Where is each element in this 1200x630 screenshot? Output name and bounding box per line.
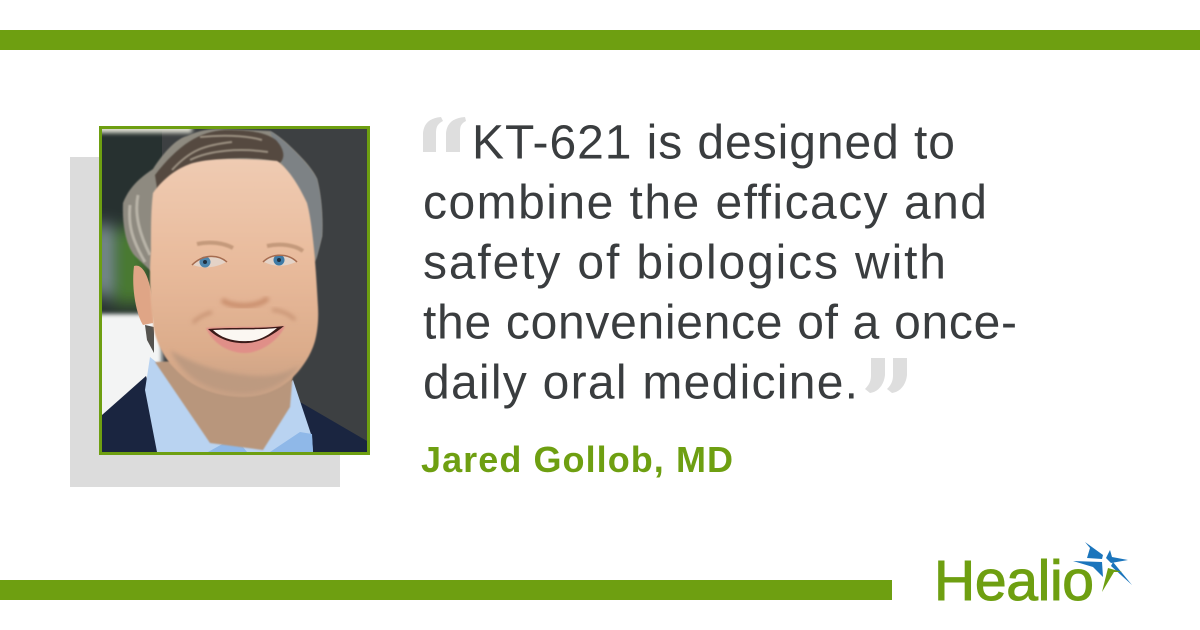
smile lines — [193, 310, 295, 323]
ear — [133, 266, 153, 325]
hair — [123, 129, 322, 273]
quote text: combine the efficacy and — [423, 176, 987, 230]
bottom green bar — [0, 580, 892, 600]
opening quotation mark — [423, 117, 466, 152]
quote text: the convenience of a once- — [423, 296, 1017, 350]
quote text — [423, 116, 1017, 410]
quote text: daily oral medicine. — [423, 356, 858, 410]
neck — [155, 360, 293, 450]
eyebrows — [197, 243, 303, 251]
Healio logo: Healio — [934, 549, 1094, 613]
top green bar — [0, 30, 1200, 50]
shirt collar — [145, 357, 313, 452]
quote text: safety of biologics with — [423, 236, 946, 290]
jacket — [102, 376, 157, 452]
face — [150, 159, 318, 397]
eyes — [193, 257, 226, 267]
stubble shading — [170, 350, 300, 393]
smile — [206, 326, 285, 353]
quote text: KT-621 is designed to — [472, 116, 955, 170]
gray offset panel behind portrait — [70, 157, 340, 487]
nose — [222, 298, 268, 306]
closing quotation mark — [865, 358, 907, 393]
attribution: Jared Gollob, MD — [421, 439, 733, 480]
portrait photo with green frame — [92, 120, 370, 459]
